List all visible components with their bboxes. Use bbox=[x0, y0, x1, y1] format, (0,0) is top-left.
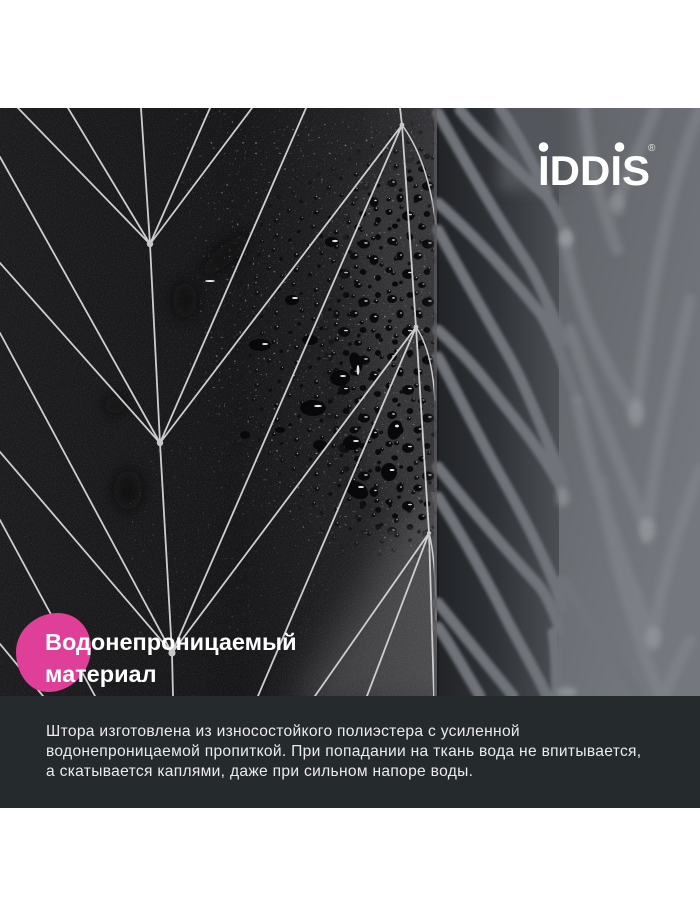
description band bbox=[0, 696, 700, 808]
fine water droplets bbox=[164, 108, 436, 569]
blurred strands: dark side bbox=[438, 108, 637, 696]
description text: Штора изготовлена из износостойкого полиэстера с усиленной bbox=[46, 723, 520, 740]
white geometric curtain pattern lines bbox=[0, 108, 436, 696]
large water droplets bbox=[205, 150, 437, 550]
light edge of curtain fold bbox=[434, 108, 437, 696]
blurred strands: light side bbox=[565, 110, 700, 696]
blurred strand nodes bbox=[556, 192, 661, 697]
medium water droplets bbox=[222, 114, 437, 558]
description text: водонепроницаемой пропиткой. При попадании на ткань вода не впитывается, bbox=[46, 743, 641, 760]
fabric base panel bbox=[0, 108, 437, 696]
description text: а скатывается каплями, даже при сильном напоре воды. bbox=[46, 763, 473, 780]
heading: Водонепроницаемый bbox=[45, 629, 297, 655]
pattern nodes bbox=[147, 123, 431, 657]
heading: материал bbox=[45, 661, 157, 687]
photo: curtain fabric with water drops and blurred background bbox=[0, 108, 700, 696]
description text bbox=[46, 723, 641, 780]
accent pink blob bbox=[16, 613, 91, 692]
wet dark patches bbox=[104, 229, 254, 510]
blurred background panel bbox=[437, 100, 700, 697]
heading bbox=[45, 629, 297, 687]
logo: IDDIS: ® bbox=[648, 143, 656, 154]
logo: IDDIS: IDDIS bbox=[538, 147, 650, 194]
